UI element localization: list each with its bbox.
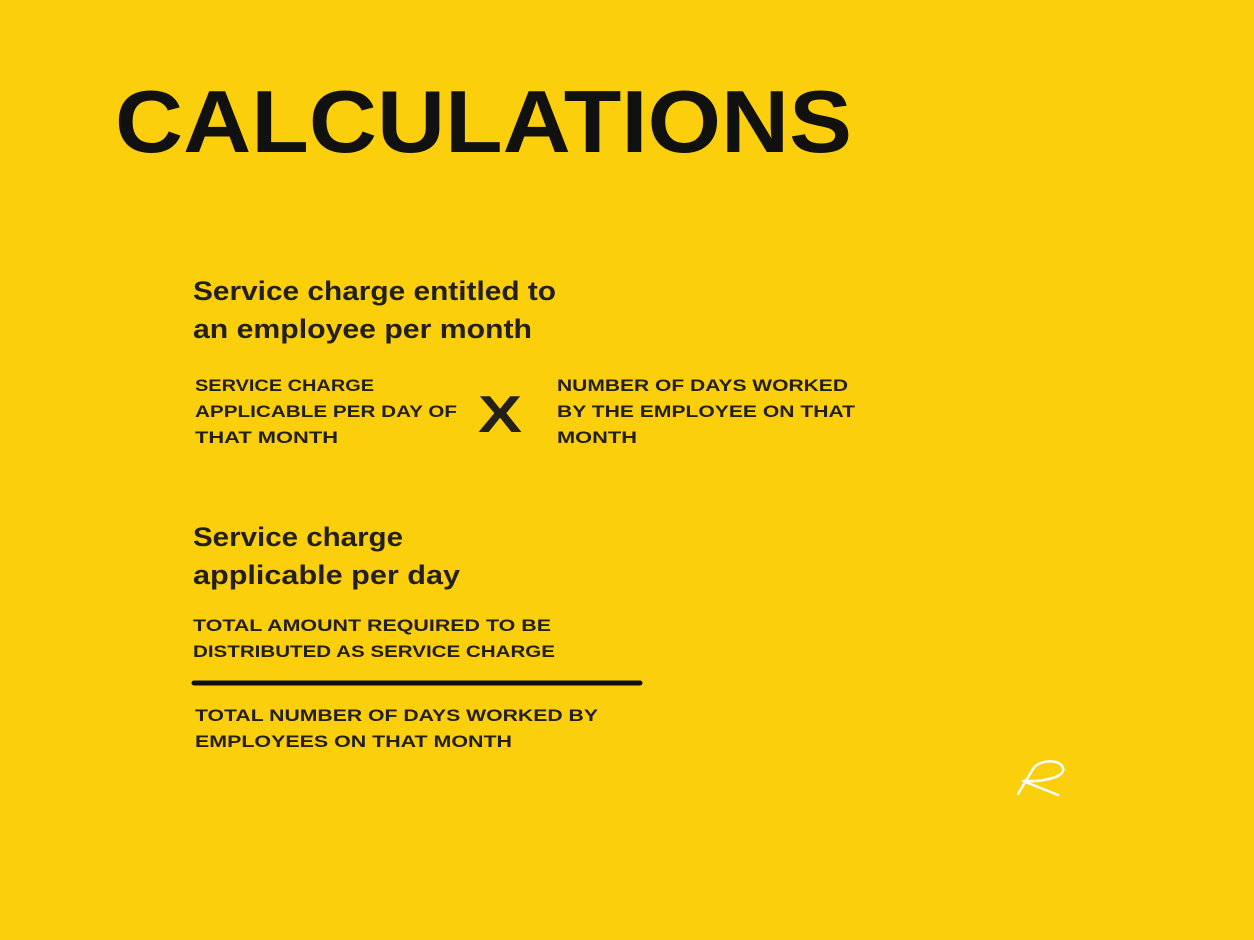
heading: service charge per day: Service charge <box>193 522 403 552</box>
text block: days worked term: BY THE EMPLOYEE ON THAT <box>557 402 856 421</box>
icon: R logo <box>1018 761 1063 795</box>
heading: service charge entitled <box>193 276 556 344</box>
denominator: EMPLOYEES ON THAT MONTH <box>195 732 512 751</box>
text block: service charge per day term: SERVICE CHARGE <box>195 376 374 395</box>
fraction line <box>194 680 640 686</box>
title: CALCULATIONS <box>115 72 852 171</box>
heading: service charge entitled: an employee per month <box>193 314 532 344</box>
numerator: DISTRIBUTED AS SERVICE CHARGE <box>193 642 555 661</box>
heading: service charge per day <box>193 522 460 590</box>
text block: days worked term: MONTH <box>557 428 637 447</box>
denominator: TOTAL NUMBER OF DAYS WORKED BY <box>195 706 599 725</box>
numerator: TOTAL AMOUNT REQUIRED TO BE <box>193 616 551 635</box>
heading: service charge entitled: Service charge entitled to <box>193 276 556 306</box>
denominator <box>195 706 599 751</box>
text block: days worked term: NUMBER OF DAYS WORKED <box>557 376 848 395</box>
heading: service charge per day: applicable per day <box>193 560 460 590</box>
text block: days worked term <box>557 376 856 447</box>
text block: service charge per day term: APPLICABLE PER DAY OF <box>195 402 457 421</box>
text block: service charge per day term: THAT MONTH <box>195 428 338 447</box>
text block: service charge per day term <box>195 376 457 447</box>
multiply sign: X <box>478 386 522 444</box>
numerator <box>193 616 555 661</box>
